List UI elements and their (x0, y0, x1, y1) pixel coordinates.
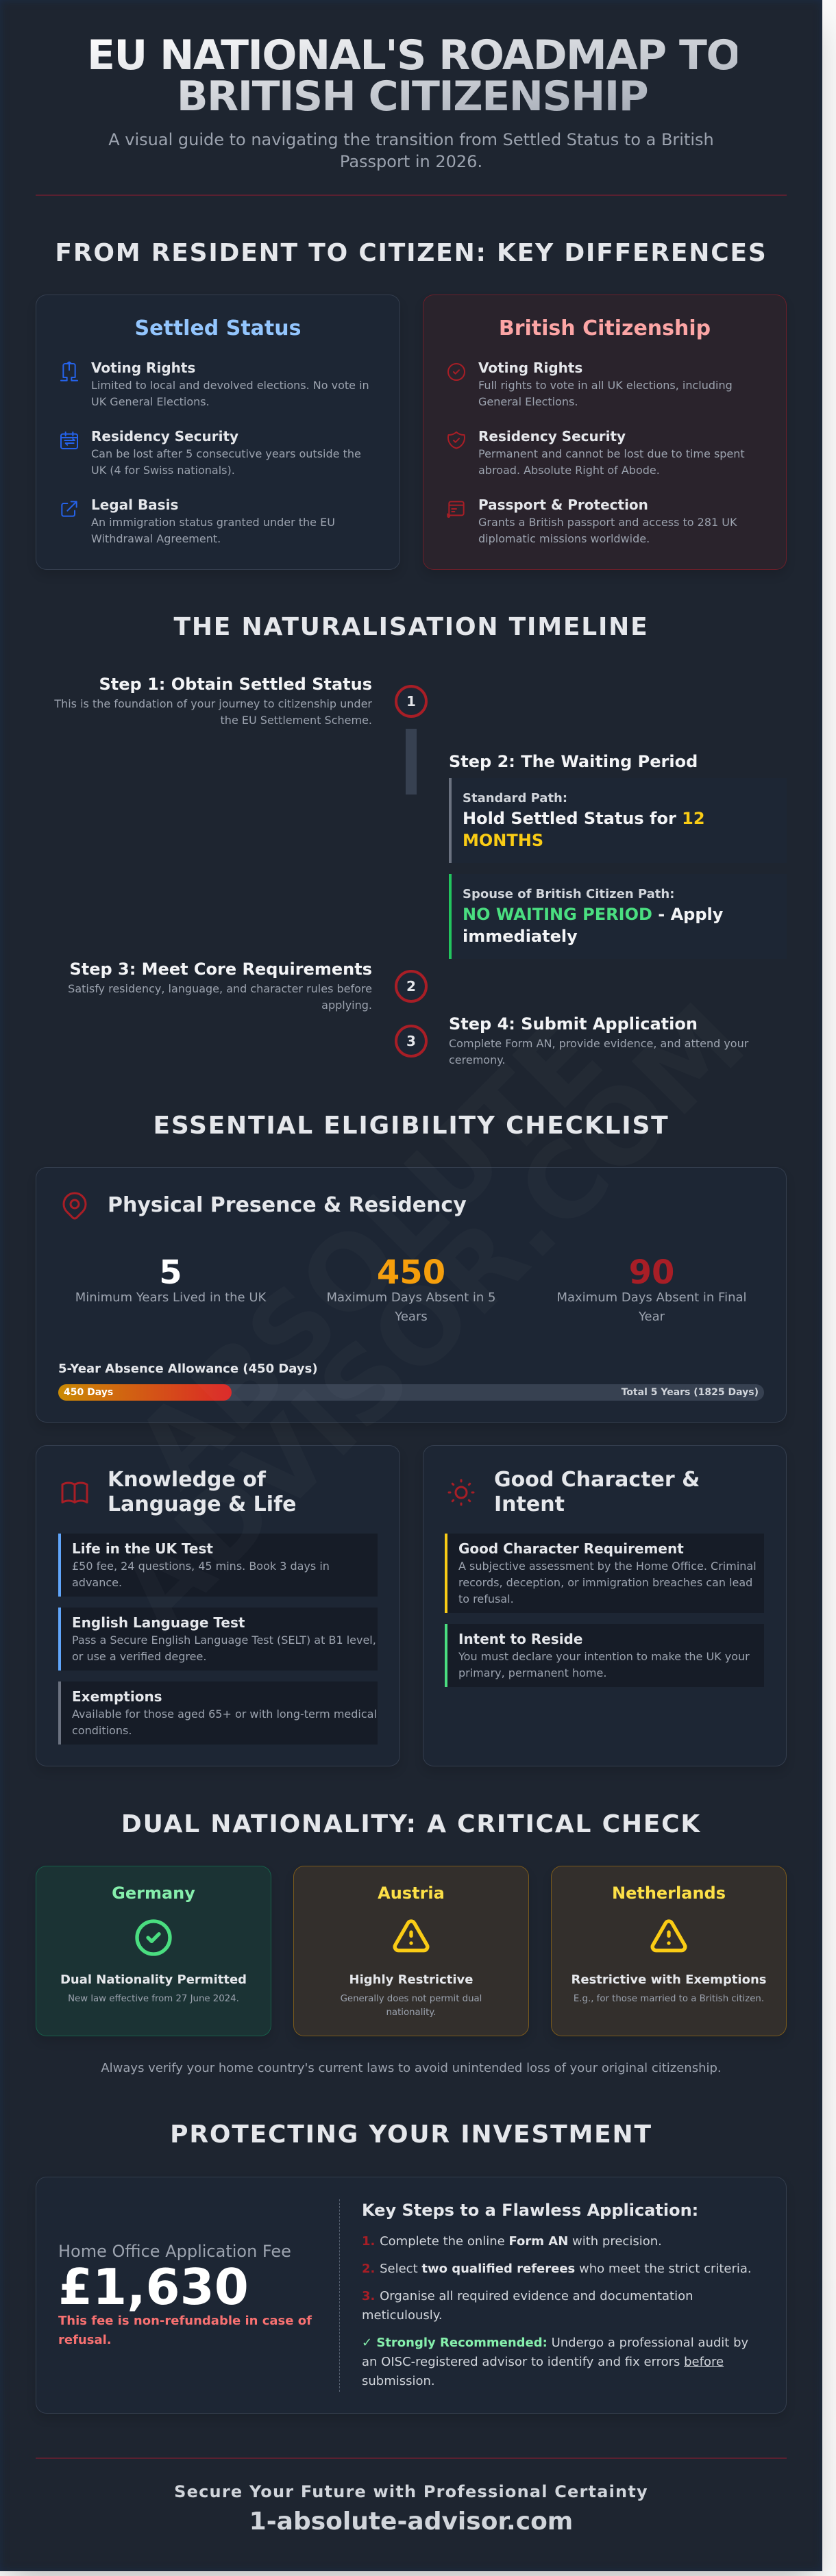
item title: Life in the UK Test (72, 1540, 213, 1557)
item: exemptions (58, 1681, 378, 1745)
item: voting rights: Full rights to vote in all UK elections, including (478, 379, 733, 392)
heading: british citizenship: British Citizenship (499, 316, 711, 340)
item: voting rights (478, 360, 733, 408)
icon: passport card (447, 501, 465, 518)
icon: book (62, 1482, 88, 1504)
step 1 (54, 675, 372, 727)
heading: investment: PROTECTING YOUR INVESTMENT (170, 2121, 652, 2149)
item: residency security: Residency Security (478, 428, 626, 445)
item: life in the uk test (58, 1534, 378, 1597)
heading: timeline: THE NATURALISATION TIMELINE (174, 613, 648, 641)
step 4: Complete Form AN, provide evidence, and attend your (449, 1037, 748, 1050)
item: voting rights (91, 360, 369, 408)
fee label: Home Office Application Fee (58, 2242, 291, 2261)
step three: meticulously. (362, 2308, 443, 2323)
subtitle: A visual guide to navigating the transition from Settled Status to a British (108, 130, 714, 149)
footer tagline: Secure Your Future with Professional Certainty (174, 2482, 648, 2501)
subtitle: Passport in 2026. (340, 152, 482, 171)
step 1: Step 1: Obtain Settled Status (99, 675, 372, 694)
heading: checklist: ESSENTIAL ELIGIBILITY CHECKLIST (153, 1112, 669, 1140)
step 1: This is the foundation of your journey to citizenship under (54, 697, 372, 710)
stat: maximum days in final year: Year (639, 1310, 665, 1324)
icon: check circle (135, 1919, 172, 1956)
value: no waiting period (463, 905, 723, 946)
panel: investment (36, 2177, 787, 2414)
panel: british citizenship (423, 295, 787, 570)
country name: Austria (378, 1884, 445, 1903)
item text: to refusal. (458, 1592, 514, 1605)
step two: 2. Select two qualified referees who meet the strict criteria. (362, 2262, 752, 2276)
item: legal basis: Legal Basis (91, 497, 178, 513)
note: verify home laws: Always verify your home country's current laws to avoid unintended loss of your original citizenship. (101, 2061, 722, 2075)
icon: warning triangle (650, 1919, 687, 1952)
recommendation: an OISC-registered advisor to identify and fix errors before (362, 2355, 724, 2369)
item: passport and protection (478, 497, 737, 545)
item: english language test (58, 1608, 378, 1671)
item: residency security: Residency Security (91, 428, 238, 445)
item text (458, 1560, 757, 1605)
stat: minimum years: 5 (159, 1253, 182, 1292)
fee warning (58, 2314, 312, 2347)
absence bar (58, 1384, 764, 1401)
country name: Netherlands (612, 1884, 726, 1903)
note (341, 1994, 482, 2018)
bar fill (58, 1384, 232, 1401)
value: 12 months: Hold Settled Status for 12 (463, 809, 705, 828)
panel: settled status (36, 295, 400, 570)
fee amount: £1,630 (58, 2258, 249, 2316)
heading: dual nationality: DUAL NATIONALITY: A CRITICAL CHECK (121, 1810, 701, 1838)
note: New law effective from 27 June 2024. (68, 1994, 239, 2004)
label: standard path: Standard Path: (463, 791, 567, 805)
watermark (0, 884, 803, 1688)
item title: Intent to Reside (458, 1631, 582, 1647)
icon: voting limited (60, 362, 78, 382)
item text: £50 fee, 24 questions, 45 mins. Book 3 days in (72, 1560, 330, 1573)
timeline marker 3 (395, 1025, 428, 1058)
recommendation: ✓ Strongly Recommended: Undergo a professional audit by (362, 2336, 748, 2350)
item: voting rights: Voting Rights (478, 360, 582, 376)
step 4: ceremony. (449, 1053, 506, 1066)
item: voting rights: UK General Elections. (91, 395, 210, 408)
status: Dual Nationality Permitted (60, 1973, 247, 1987)
stat: maximum days in 5 years (326, 1253, 496, 1324)
standard path box (449, 778, 787, 863)
item: legal basis: Withdrawal Agreement. (91, 532, 221, 545)
stat: maximum days in final year (556, 1253, 747, 1324)
item text: records, deception, or immigration breaches can lead (458, 1576, 752, 1589)
title: BRITISH CITIZENSHIP (177, 73, 648, 121)
timeline marker 2: 2 (406, 978, 416, 995)
item text: Pass a Secure English Language Test (SELT) at B1 level, (72, 1634, 376, 1647)
step 2 heading: Step 2: The Waiting Period (449, 752, 698, 771)
item text: advance. (72, 1576, 122, 1589)
icon: warning triangle (393, 1919, 430, 1952)
panel: character (423, 1445, 787, 1766)
stat: maximum days in final year: Maximum Days Absent in Final (556, 1290, 747, 1305)
step 1: the EU Settlement Scheme. (221, 714, 372, 727)
panel heading (108, 1468, 296, 1516)
heading: key differences: FROM RESIDENT TO CITIZEN: KEY DIFFERENCES (55, 239, 767, 267)
item text: or use a verified degree. (72, 1650, 206, 1663)
step 4 (449, 1014, 748, 1066)
recommendation (362, 2336, 748, 2388)
footer url: 1-absolute-advisor.com (249, 2508, 573, 2536)
step three (362, 2289, 693, 2323)
title (87, 35, 737, 117)
icon: check circle (447, 363, 465, 381)
card: austria (293, 1866, 529, 2036)
item: residency security: Can be lost after 5 consecutive years outside the (91, 447, 361, 460)
item title: Good Character Requirement (458, 1540, 684, 1557)
timeline marker 3: 3 (406, 1033, 416, 1049)
note: nationality. (386, 2008, 436, 2018)
status: Highly Restrictive (349, 1973, 473, 1987)
stat: maximum days in 5 years: 450 (377, 1253, 445, 1292)
item: voting rights: Limited to local and devolved elections. No vote in (91, 379, 369, 392)
item: residency security (91, 428, 361, 477)
item text (72, 1634, 376, 1663)
note: Generally does not permit dual (341, 1994, 482, 2004)
panel heading: Intent (494, 1492, 565, 1516)
watermark: ABSOLUTE (113, 998, 626, 1510)
title: EU NATIONAL'S ROADMAP TO (87, 32, 740, 79)
item text: primary, permanent home. (458, 1666, 606, 1679)
stat: maximum days in final year: 90 (629, 1253, 674, 1292)
item: good character (445, 1534, 764, 1613)
steps heading: Key Steps to a Flawless Application: (362, 2201, 698, 2220)
icon: shield check (447, 432, 465, 449)
step 3: Step 3: Meet Core Requirements (69, 960, 372, 979)
step 3 (68, 960, 372, 1012)
icon: external link (61, 501, 77, 517)
heading: settled status: Settled Status (135, 316, 301, 340)
absence bar label: 5-Year Absence Allowance (450 Days) (58, 1362, 318, 1376)
icon: sun (448, 1479, 474, 1505)
item text: A subjective assessment by the Home Office. Criminal (458, 1560, 757, 1573)
panel heading: Physical Presence & Residency (108, 1193, 467, 1217)
item text (458, 1650, 750, 1679)
panel heading: Language & Life (108, 1492, 296, 1516)
item text: You must declare your intention to make the UK your (458, 1650, 750, 1663)
timeline marker 2 (395, 970, 428, 1003)
stat: maximum days in 5 years: Years (395, 1310, 428, 1324)
item: passport and protection: Grants a British passport and access to 281 UK (478, 516, 737, 529)
item text (72, 1560, 330, 1589)
timeline marker 1 (395, 685, 428, 718)
item: intent to reside (445, 1624, 764, 1687)
note: E.g., for those married to a British citizen. (574, 1994, 764, 2004)
value: no waiting period: NO WAITING PERIOD - Apply (463, 905, 723, 924)
item title: Exemptions (72, 1688, 162, 1705)
panel: physical presence (36, 1167, 787, 1423)
panel heading: Knowledge of (108, 1468, 266, 1492)
timeline marker 1: 1 (406, 693, 416, 710)
icon: calendar (60, 432, 78, 449)
item: residency security (478, 428, 745, 477)
card: netherlands (551, 1866, 787, 2036)
item: residency security: Permanent and cannot be lost due to time spent (478, 447, 745, 460)
icon: location pin (63, 1192, 86, 1219)
card: germany (36, 1866, 271, 2036)
item: voting rights: General Elections. (478, 395, 578, 408)
value: no waiting period: immediately (463, 927, 578, 946)
item: residency security: abroad. Absolute Right of Abode. (478, 464, 660, 477)
label: spouse path: Spouse of British Citizen Path: (463, 887, 674, 901)
step 3: Satisfy residency, language, and character rules before (68, 982, 372, 995)
panel: knowledge (36, 1445, 400, 1766)
status: Restrictive with Exemptions (571, 1973, 766, 1987)
item: passport and protection: Passport & Protection (478, 497, 648, 513)
stat: maximum days in 5 years: Maximum Days Absent in 5 (326, 1290, 496, 1305)
subtitle (108, 130, 714, 171)
item: legal basis: An immigration status granted under the EU (91, 516, 335, 529)
panel heading: Good Character & (494, 1468, 700, 1492)
item text: Available for those aged 65+ or with long-term medical (72, 1708, 377, 1721)
item title: English Language Test (72, 1614, 245, 1631)
timeline connector (406, 729, 417, 795)
item: passport and protection: diplomatic missions worldwide. (478, 532, 650, 545)
country name: Germany (112, 1884, 195, 1903)
spouse path box (449, 874, 787, 959)
item text: conditions. (72, 1724, 132, 1737)
step three: 3. Organise all required evidence and documentation (362, 2289, 693, 2303)
fee warning: This fee is non-refundable in case of (58, 2314, 312, 2328)
step 4: Step 4: Submit Application (449, 1014, 698, 1034)
step one: 1. Complete the online Form AN with precision. (362, 2234, 662, 2249)
step 3: applying. (321, 999, 372, 1012)
value: 12 months (463, 809, 705, 850)
bar total: Total 5 Years (1825 Days) (622, 1387, 759, 1398)
stat: minimum years: Minimum Years Lived in the UK (75, 1290, 266, 1305)
item: voting rights: Voting Rights (91, 360, 195, 376)
bar fill: 450 Days (64, 1387, 113, 1398)
item text (72, 1708, 377, 1737)
item: legal basis (91, 497, 335, 545)
fee warning: refusal. (58, 2333, 112, 2347)
recommendation: submission. (362, 2374, 435, 2388)
item: residency security: UK (4 for Swiss nationals). (91, 464, 235, 477)
stat: minimum years (75, 1253, 266, 1305)
value: 12 months: MONTHS (463, 831, 543, 850)
panel heading (494, 1468, 700, 1516)
watermark: ADVISOR.COM (97, 982, 767, 1652)
